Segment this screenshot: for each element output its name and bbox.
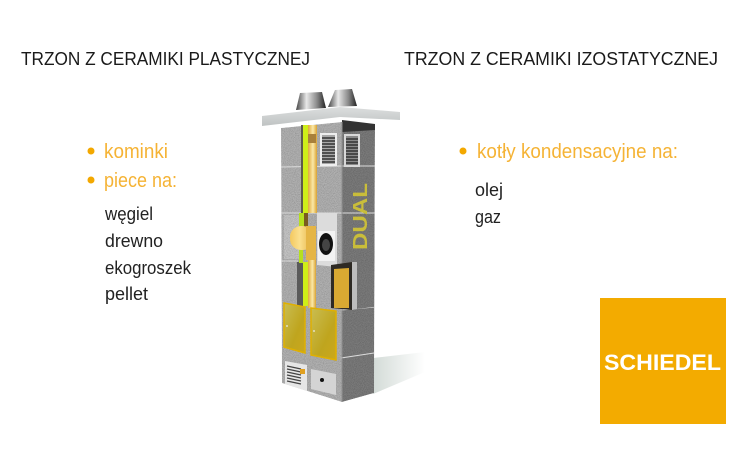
fuel list: gaz [475,207,501,227]
left list: uses [88,141,192,304]
fuel list: pellet [105,284,148,304]
flue inlet plate [317,213,337,267]
top shadow under cap [342,120,375,132]
left face [281,122,342,402]
flue channel cutaway [297,125,317,308]
soot door [311,369,336,395]
bullet: condensing boilers: kotły kondensacyjne na: [477,141,678,163]
fuel list [104,204,192,304]
fuel list: drewno [105,231,163,251]
insulated channel cutaway [331,262,374,310]
stove connector panel [284,215,299,259]
title: left heading: TRZON Z CERAMIKI PLASTYCZNEJ [21,49,310,69]
right face [342,122,375,402]
chimney illustration [262,89,425,402]
cap [262,107,400,126]
logo: Schiedel [600,298,726,424]
yellow door right [311,308,336,360]
block joints [281,122,375,402]
bullet list: orange items [88,141,177,192]
bullet list: orange items: piece na: [104,170,177,192]
logo: Schiedel: SCHIEDEL [604,350,721,375]
grille top left [320,133,337,166]
flue cones [296,89,357,110]
ground shadow [373,352,425,394]
DUAL lettering: DUAL [350,183,372,250]
bottom vent grille [285,361,307,391]
right list: uses [460,141,678,227]
fuel list: olej [475,180,503,200]
fuel list [475,180,503,227]
connector pipe elbow [290,213,316,263]
bullet list: orange items: kominki [104,141,168,163]
yellow door left [284,303,305,353]
fuel list: węgiel [104,204,153,224]
title: right heading: TRZON Z CERAMIKI IZOSTATYCZNEJ [404,49,718,69]
fuel list: ekogroszek [105,258,192,278]
grille top right [344,134,360,167]
